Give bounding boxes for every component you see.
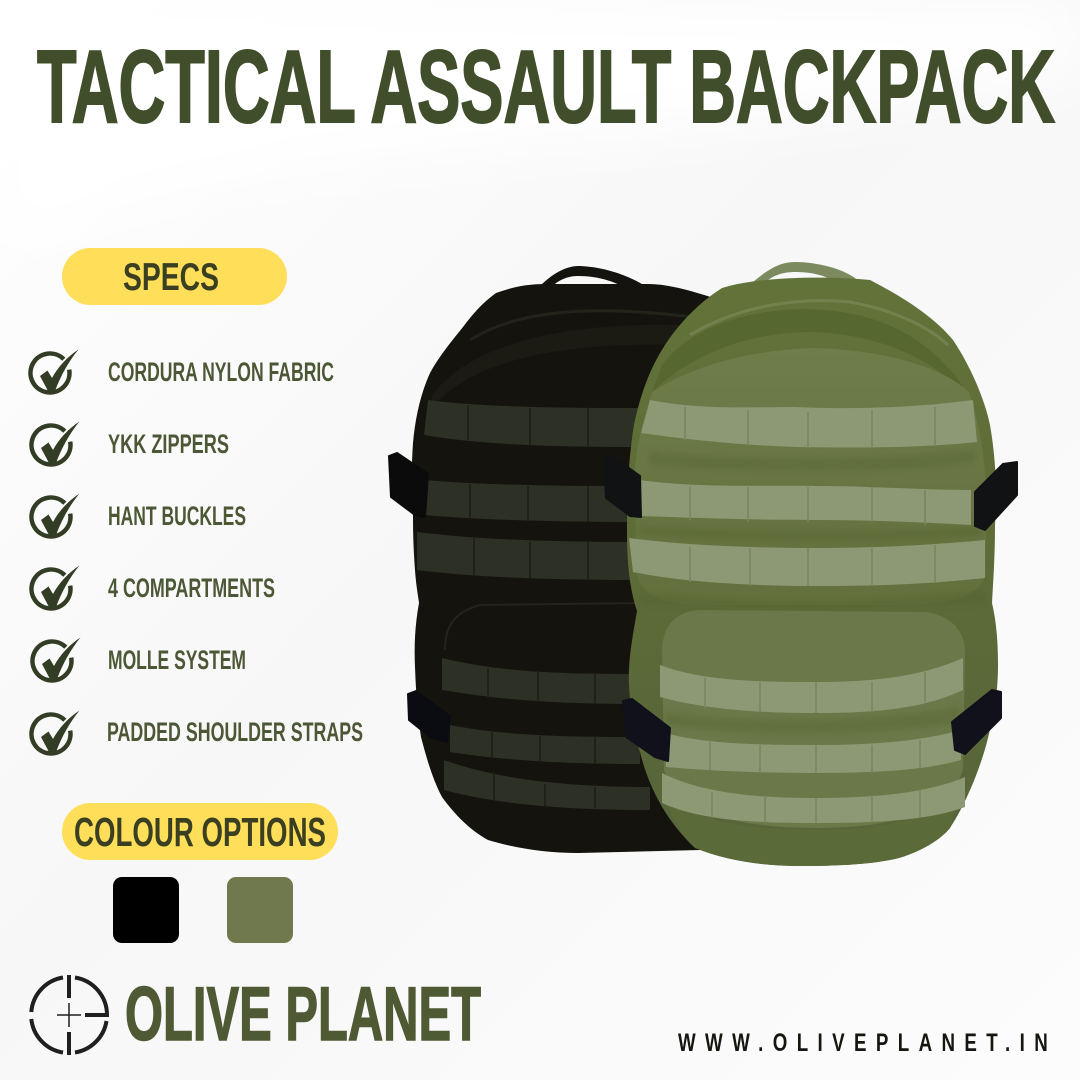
olive pack lower panel [662,610,965,828]
swatch: black [113,877,179,943]
olive pack top compartment layers [652,309,968,395]
black pack upper buckle [389,453,428,517]
olive pack handle [753,262,860,286]
olive pack upper left buckle [604,456,641,517]
black backpack [389,266,720,853]
swatch: olive [227,877,293,943]
black pack webbing stitching [468,405,595,808]
olive pack upper right buckle [975,462,1017,530]
olive pack base [664,785,964,866]
black pack lower pocket seam [445,603,650,650]
black pack body [412,284,720,853]
black pack webbing [417,400,650,810]
spec item: 4 compartments: 4 COMPARTMENTS [108,573,275,603]
spec item: Padded shoulder straps [31,710,363,753]
brand name: OLIVE PLANET [125,972,481,1057]
black pack handle [540,266,648,290]
specs heading pill: SPECS [123,256,219,299]
spec item: Cordura nylon fabric [30,350,334,392]
colour options heading pill [62,803,338,860]
olive pack webbing stitching [685,407,935,823]
spec item: Molle system: MOLLE SYSTEM [108,645,246,675]
spec item: Cordura nylon fabric: CORDURA NYLON FABRIC [108,357,334,387]
olive pack lower left buckle [623,699,670,761]
black pack lower buckle [408,691,450,742]
olive pack dark fabric shadows [640,450,985,734]
spec item: YKK zippers [31,422,229,464]
panel: specs [30,248,363,753]
panel: colour options [62,803,338,943]
spec item: Padded shoulder straps: PADDED SHOULDER STRAPS [107,717,363,747]
spec item: 4 compartments [31,566,275,608]
colour options heading pill: COLOUR OPTIONS [74,809,326,855]
olive backpack [604,262,1017,866]
spec item: Molle system [32,638,246,680]
olive pack lower right buckle [952,690,1001,754]
specs heading pill [62,248,287,305]
spec item: Hant buckles [31,494,246,536]
olive pack webbing [629,400,985,823]
website: WWW.OLIVEPLANET.IN [678,1028,1048,1057]
olive pack upper panel [635,348,986,605]
olive pack body [627,278,998,866]
spec item: YKK zippers: YKK ZIPPERS [108,429,229,459]
brand logo: crosshair [31,975,107,1055]
spec item: Hant buckles: HANT BUCKLES [108,501,246,531]
